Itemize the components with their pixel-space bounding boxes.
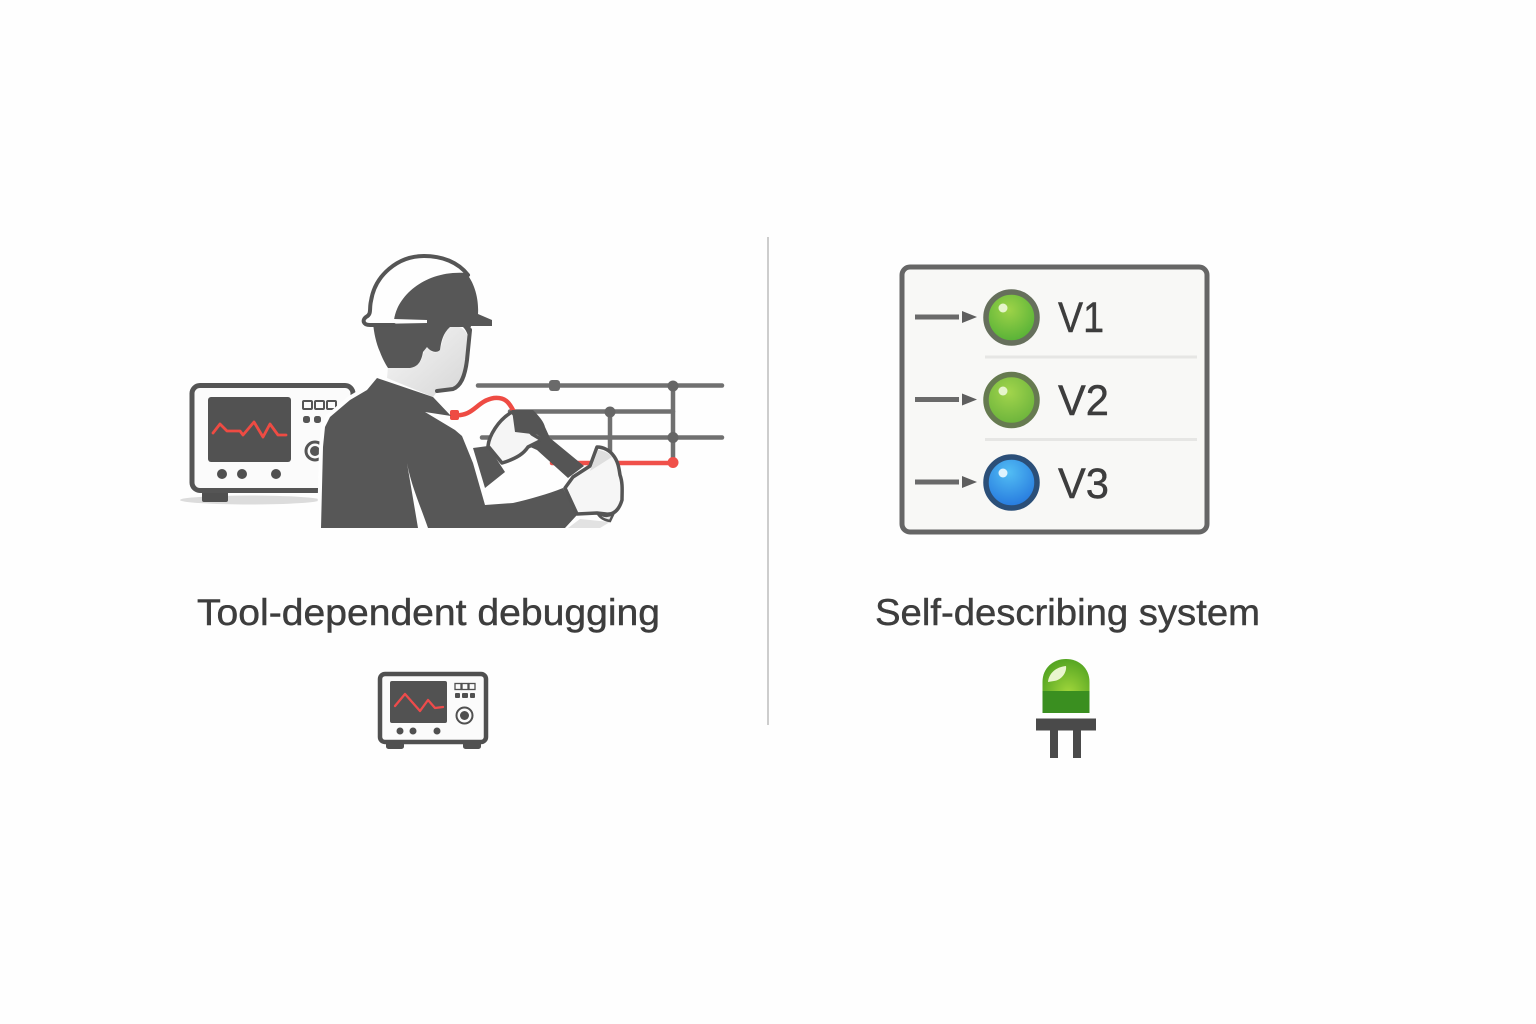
row V2 [915, 374, 1109, 426]
white gap around shoulder [321, 378, 377, 530]
dial [306, 442, 324, 460]
head and hair [373, 271, 492, 368]
divider [767, 237, 769, 725]
screen [208, 397, 291, 462]
neck and face [387, 326, 468, 397]
panel: self-describing status board [902, 267, 1207, 532]
heading: tool-dependent debugging: Tool-dependent debugging [197, 592, 660, 633]
row V1 [915, 292, 1104, 343]
lower hand [565, 447, 622, 528]
probe handle [512, 410, 584, 478]
heading: self-describing system: Self-describing system [875, 592, 1260, 633]
body jacket [321, 378, 577, 528]
oscilloscope large [180, 386, 353, 504]
row V3 [915, 457, 1109, 508]
icon: LED [1036, 659, 1096, 758]
red probe traces [450, 398, 678, 468]
row V3: V3 [1058, 460, 1109, 508]
row V1: V1 [1058, 294, 1104, 342]
upper hand [488, 412, 542, 463]
waveform [213, 422, 286, 437]
sleeve upper arm [473, 446, 505, 488]
circuit wires [478, 380, 722, 462]
icon: oscilloscope [380, 674, 486, 749]
helmet [364, 256, 468, 325]
control squares [303, 401, 336, 409]
row dividers [985, 357, 1197, 440]
board frame [902, 267, 1207, 532]
knobs row [217, 469, 227, 479]
feet [202, 490, 228, 502]
case [192, 386, 353, 490]
row V2: V2 [1058, 377, 1109, 425]
shadow [180, 496, 320, 504]
illustration: engineer probing circuit with oscilloscope [180, 256, 722, 530]
